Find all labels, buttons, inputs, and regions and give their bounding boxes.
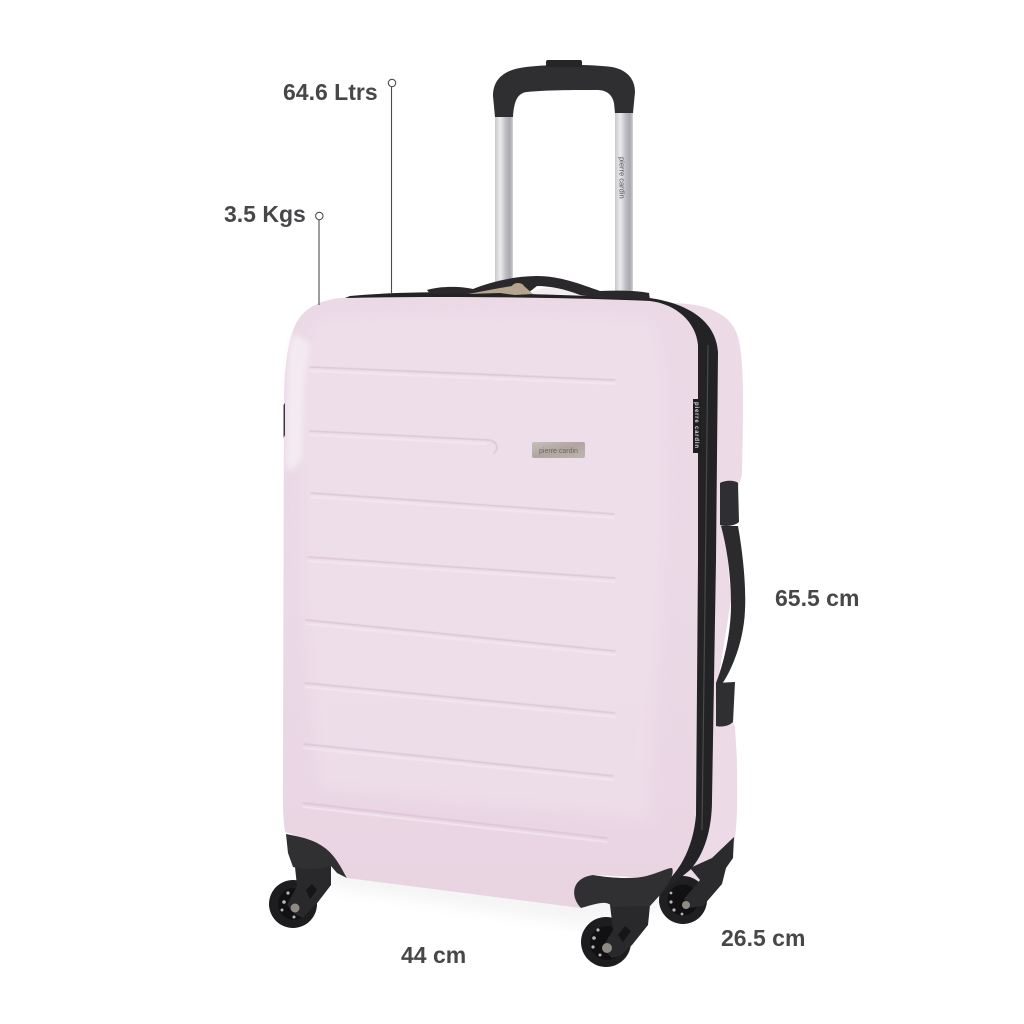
- rib 2 short with curved end: [310, 431, 497, 453]
- rib 7: [304, 744, 613, 780]
- rib 8: [303, 803, 607, 842]
- gap under strap: [530, 287, 582, 295]
- fork slot: [618, 926, 631, 942]
- height label: 65.5 cm: [775, 585, 859, 611]
- weight label: 3.5 Kgs: [224, 201, 306, 227]
- callout: volume: [283, 79, 396, 294]
- hub: [278, 888, 310, 920]
- brand plate: pierre cardin: [539, 448, 578, 455]
- rear hub: [668, 884, 698, 916]
- handle strap: [427, 276, 650, 300]
- depth label: 26.5 cm: [721, 925, 805, 951]
- wheel: [269, 880, 317, 928]
- zipper groove highlight: [702, 345, 708, 830]
- left pole: [495, 115, 513, 285]
- zipper pull: [468, 283, 533, 295]
- rib 4: [308, 557, 615, 582]
- rear caster: [659, 837, 734, 924]
- right pole: [615, 112, 633, 294]
- front shell: [283, 297, 698, 908]
- rear axle: [682, 901, 690, 909]
- telescopic trolley handle: [493, 60, 635, 294]
- top trim and side zipper: [345, 292, 718, 893]
- floor shadow: [320, 865, 680, 925]
- pole brand text: pierre cardin: [618, 157, 626, 199]
- left side shadow strip: [284, 403, 285, 438]
- rib 6: [305, 683, 615, 717]
- width label: 44 cm: [401, 942, 466, 968]
- rear corner guard and fork: [684, 837, 734, 908]
- fork: [287, 866, 331, 918]
- highlight on left rim: [286, 335, 310, 470]
- hub spoke holes: [280, 891, 304, 918]
- hub: [590, 926, 624, 960]
- fork: [602, 905, 650, 958]
- fork slot: [306, 884, 317, 899]
- fabric brand tag: pierre cardin: [693, 402, 699, 448]
- corner guard: [286, 834, 347, 878]
- weight leader line: [316, 212, 323, 305]
- front right caster: [574, 868, 673, 967]
- volume label: 64.6 Ltrs: [283, 79, 378, 105]
- handle button: [546, 60, 582, 67]
- callout: weight: [224, 201, 323, 305]
- wheel: [581, 917, 631, 967]
- rear wheel: [659, 876, 707, 924]
- rear shell: [640, 303, 743, 895]
- side carry handle: [716, 481, 745, 727]
- axle: [290, 904, 300, 912]
- front left caster: [269, 834, 347, 928]
- axle: [602, 943, 612, 953]
- fabric brand tag: [693, 399, 701, 453]
- handle grip: [493, 65, 635, 117]
- moulded horizontal ribs: [303, 367, 615, 842]
- brand plate: [532, 442, 585, 458]
- rib 3: [311, 493, 614, 518]
- light inner panel of the shell: [303, 314, 664, 820]
- lower mount: [716, 682, 735, 727]
- rear hub spoke holes: [669, 892, 683, 915]
- upper mount: [720, 481, 739, 526]
- hub spoke holes: [591, 928, 602, 956]
- rib 1: [310, 367, 615, 384]
- corner guard: [574, 868, 673, 908]
- top carry handle: [427, 276, 650, 300]
- volume leader line: [388, 79, 396, 294]
- rib 5: [306, 620, 615, 655]
- strap: [716, 526, 745, 684]
